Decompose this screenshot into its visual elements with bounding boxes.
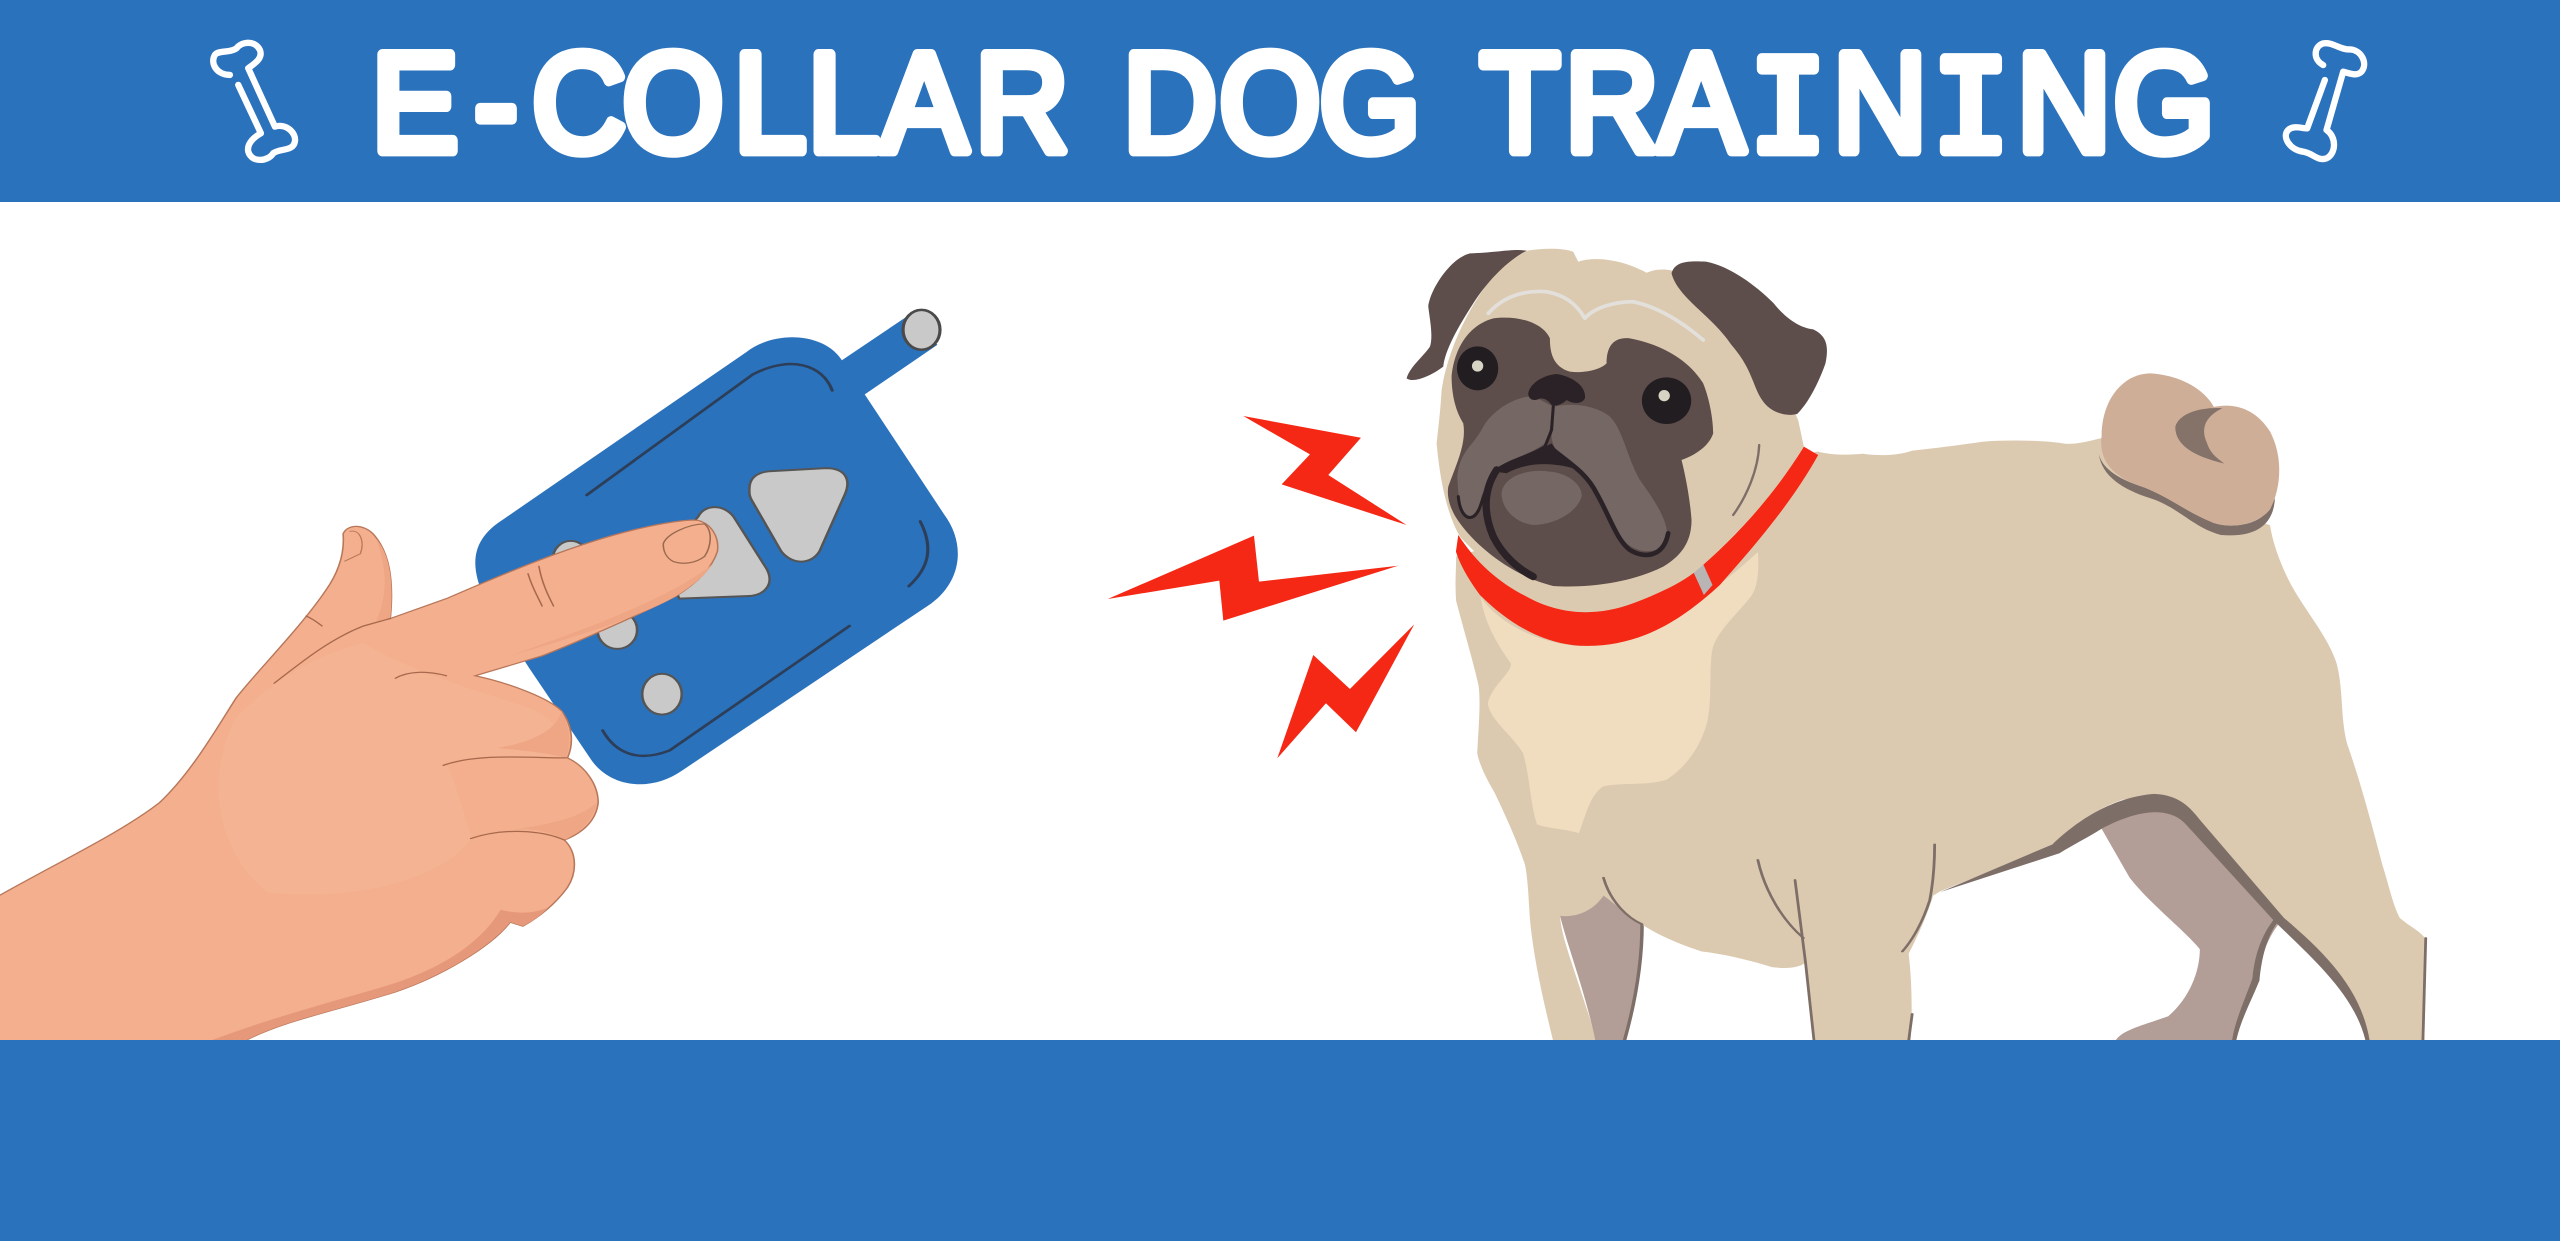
upper bolt bbox=[1243, 416, 1407, 525]
antenna bbox=[835, 317, 937, 397]
large triangle button bbox=[749, 468, 847, 562]
remote body bbox=[475, 337, 958, 784]
tail curl bbox=[2175, 408, 2224, 464]
neck crease bbox=[1733, 445, 1759, 515]
far back leg bbox=[2102, 807, 2284, 1040]
icon: right bone bbox=[2286, 43, 2364, 159]
collar buckle bbox=[1693, 563, 1713, 595]
dog head bbox=[1407, 249, 1827, 646]
right muzzle bbox=[1552, 405, 1667, 551]
leg crease lines bbox=[1603, 844, 2426, 1040]
far front leg bbox=[1560, 873, 1642, 1040]
tail bbox=[2101, 373, 2279, 526]
bottom band bbox=[0, 1040, 2560, 1241]
small triangle button bbox=[663, 507, 770, 599]
main body bbox=[1456, 438, 2426, 1040]
collar bbox=[1456, 447, 1818, 646]
chest patch bbox=[1481, 552, 1758, 833]
lightning bolts bbox=[1108, 416, 1414, 758]
remote control bbox=[475, 310, 958, 784]
hand creases bbox=[274, 566, 566, 840]
right ear bbox=[1672, 261, 1827, 415]
knuckle shadows bbox=[376, 539, 713, 840]
far back leg shade bbox=[2232, 916, 2281, 1040]
finger nail bbox=[663, 524, 710, 563]
nose bbox=[1528, 374, 1585, 406]
right eye bbox=[1642, 377, 1691, 424]
thumb nail bbox=[344, 531, 362, 561]
remote inner lines bbox=[587, 364, 928, 756]
head base bbox=[1437, 249, 1804, 605]
forehead wrinkle bbox=[1488, 291, 1703, 340]
left eye bbox=[1457, 346, 1498, 390]
belly shadow bbox=[1940, 794, 2370, 1040]
title: E-COLLAR DOG TRAINING bbox=[372, 24, 2215, 194]
face mask bbox=[1448, 318, 1713, 586]
mouth center bbox=[1495, 443, 1578, 473]
pug dog bbox=[1407, 249, 2426, 1040]
lower bolt bbox=[1277, 624, 1414, 758]
middle bolt bbox=[1108, 536, 1398, 621]
icon: left bone bbox=[213, 43, 295, 160]
chin patch bbox=[1502, 471, 1582, 525]
left muzzle bbox=[1457, 397, 1553, 517]
illustration bbox=[0, 43, 2426, 1047]
mouth lines bbox=[1458, 407, 1668, 577]
header band bbox=[0, 0, 2560, 202]
remote and hand bbox=[0, 310, 958, 1047]
hand bbox=[0, 520, 718, 1047]
tail shadow bbox=[2099, 454, 2275, 535]
hand shape bbox=[0, 520, 718, 1047]
hand shadow bbox=[210, 907, 548, 1041]
dog body bbox=[1456, 373, 2426, 1040]
antenna button bbox=[903, 310, 940, 350]
hand highlight bbox=[219, 643, 563, 895]
round buttons bbox=[553, 541, 682, 715]
left ear bbox=[1407, 250, 1527, 380]
